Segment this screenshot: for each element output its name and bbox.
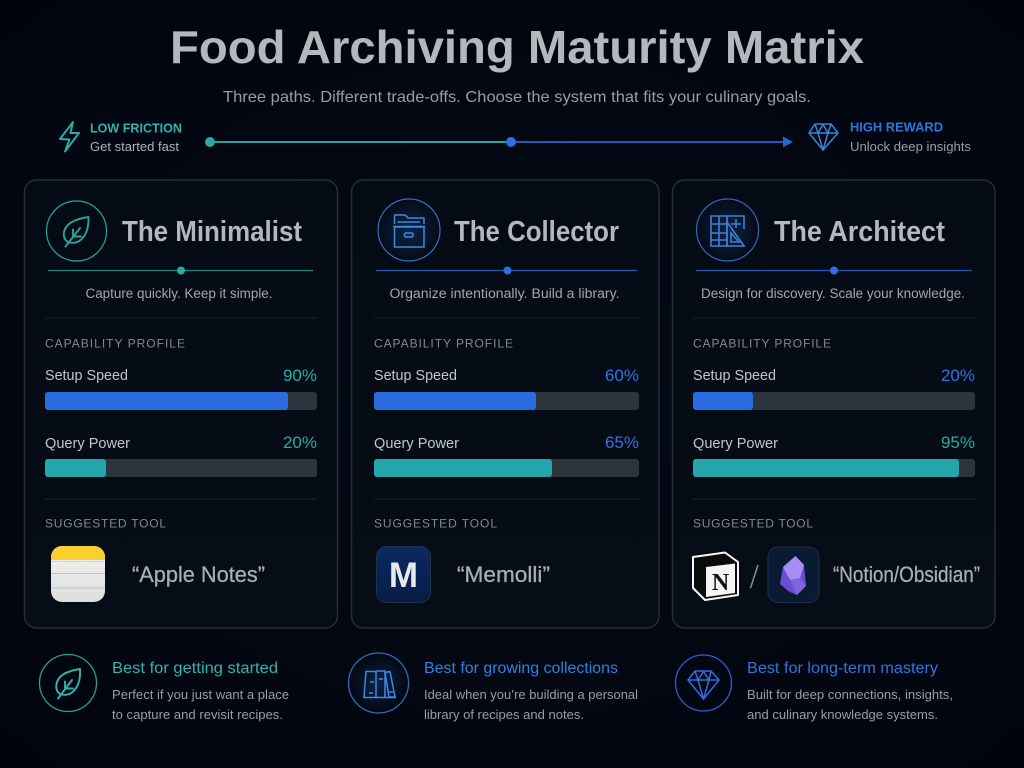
metric: setup speed xyxy=(693,366,975,410)
subtitle: Three paths. Different trade-offs. Choose the system that fits your culinary goals. xyxy=(223,89,811,106)
callout text: Ideal when you’re building a personal xyxy=(424,687,638,702)
metric: query power: Query Power xyxy=(374,436,459,452)
callout text: Best for growing collections xyxy=(424,660,618,677)
callout text: library of recipes and notes. xyxy=(424,707,584,722)
callout text: Perfect if you just want a place xyxy=(112,687,289,702)
title: Food Archiving Maturity Matrix xyxy=(170,21,864,73)
icon: memolli xyxy=(376,546,430,602)
card title: The Minimalist xyxy=(122,216,302,248)
callout text xyxy=(747,660,953,722)
icon: lightning bolt xyxy=(60,122,79,152)
metric: setup speed xyxy=(45,366,317,410)
capability heading: CAPABILITY PROFILE xyxy=(693,336,831,350)
label: low friction xyxy=(90,120,182,154)
callout text xyxy=(424,660,638,722)
callout: best for growing collections xyxy=(348,653,638,722)
separator slash xyxy=(750,565,758,588)
panel: The Minimalist xyxy=(24,180,338,628)
label: low friction: LOW FRICTION xyxy=(90,120,182,136)
metric: query power: 65% xyxy=(605,433,639,452)
accent line xyxy=(376,266,637,274)
callout text: Built for deep connections, insights, xyxy=(747,687,953,702)
card title: The Architect xyxy=(774,216,945,248)
accent line xyxy=(48,266,313,274)
metric: query power xyxy=(374,433,639,477)
icon: leaf xyxy=(40,654,96,712)
capability heading: CAPABILITY PROFILE xyxy=(374,336,513,350)
label: low friction: Get started fast xyxy=(90,139,179,154)
metric: setup speed: 20% xyxy=(941,366,975,385)
metric: setup speed xyxy=(374,366,639,410)
metric: setup speed: Setup Speed xyxy=(45,368,128,384)
label: high reward: HIGH REWARD xyxy=(850,120,943,134)
suggested tool heading: SUGGESTED TOOL xyxy=(45,516,166,530)
callout: best for getting started xyxy=(40,654,289,722)
metric: setup speed: 90% xyxy=(283,366,317,385)
icon: memolli: M xyxy=(389,556,418,595)
accent line xyxy=(696,266,972,274)
metric: query power: Query Power xyxy=(45,436,130,452)
metric: setup speed: 60% xyxy=(605,366,639,385)
tagline: Capture quickly. Keep it simple. xyxy=(86,286,272,301)
metric: setup speed: Setup Speed xyxy=(693,368,776,384)
icon: notion xyxy=(693,552,738,600)
callout text: to capture and revisit recipes. xyxy=(112,707,283,722)
spectrum: low friction to high reward xyxy=(60,120,971,154)
card title: The Collector xyxy=(454,216,619,248)
tool name: “Memolli” xyxy=(457,562,550,587)
icon: books xyxy=(348,653,408,713)
arrow: friction to reward xyxy=(205,136,793,148)
metric: query power xyxy=(693,433,975,477)
tagline: Organize intentionally. Build a library. xyxy=(390,286,620,301)
icon: diamond xyxy=(809,124,838,150)
tool name: “Notion/Obsidian” xyxy=(833,562,980,587)
tagline: Design for discovery. Scale your knowledge. xyxy=(701,286,965,301)
icon: diamond xyxy=(676,655,732,711)
metric: query power xyxy=(45,433,317,477)
callout: best for long-term mastery xyxy=(676,655,953,722)
callout text: Best for getting started xyxy=(112,660,278,677)
icon: leaf xyxy=(46,201,106,261)
suggested tool heading: SUGGESTED TOOL xyxy=(374,516,497,530)
icon: archive box xyxy=(378,199,440,261)
callout text: and culinary knowledge systems. xyxy=(747,707,938,722)
metric: setup speed: Setup Speed xyxy=(374,368,457,384)
panel: The Architect xyxy=(672,180,995,628)
icon: obsidian xyxy=(768,547,819,602)
suggested tool heading: SUGGESTED TOOL xyxy=(693,516,813,530)
metric: query power: 95% xyxy=(941,433,975,452)
icon: notion: N xyxy=(712,570,730,596)
callout text: Best for long-term mastery xyxy=(747,660,938,677)
icon: apple notes xyxy=(51,546,105,602)
capability heading: CAPABILITY PROFILE xyxy=(45,336,185,350)
callout text xyxy=(112,660,289,722)
panel: The Collector xyxy=(352,180,659,628)
icon: blueprint xyxy=(696,199,758,261)
label: high reward: Unlock deep insights xyxy=(850,139,971,154)
tool name: “Apple Notes” xyxy=(132,562,265,587)
metric: query power: 20% xyxy=(283,433,317,452)
metric: query power: Query Power xyxy=(693,436,778,452)
label: high reward xyxy=(850,120,971,154)
